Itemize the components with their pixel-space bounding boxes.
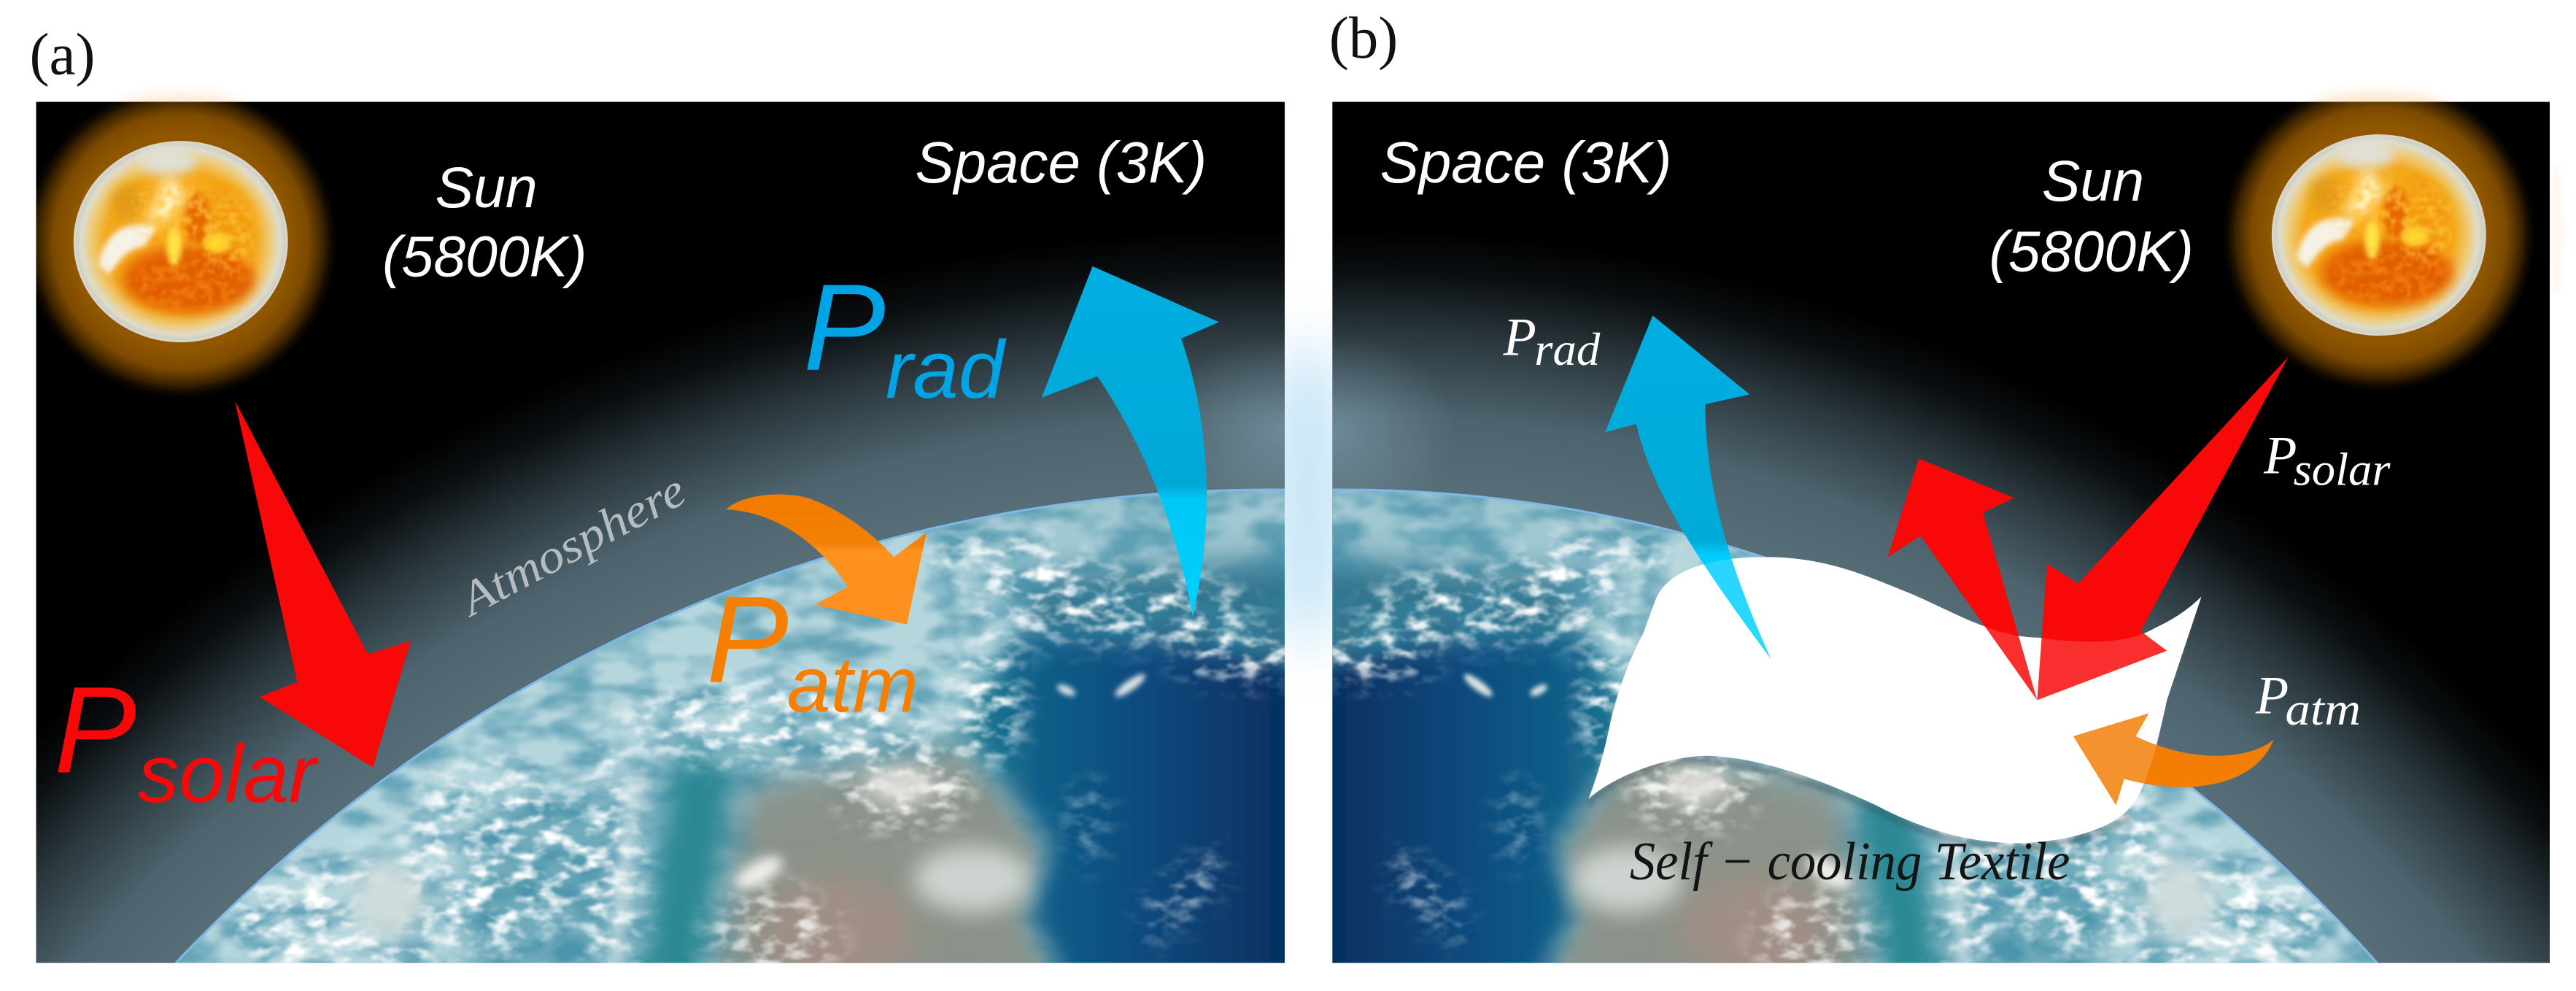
label: P atm: P <box>2255 666 2289 725</box>
label: Atmosphere: Atmosphere <box>449 464 695 628</box>
label: P solar: P <box>54 660 136 798</box>
textile sheet shadow <box>1587 760 2129 848</box>
label: Sun temperature: Sun <box>2042 149 2144 213</box>
label: P rad <box>1503 307 1601 375</box>
label: Sun temperature <box>385 167 584 288</box>
earth limb line <box>176 490 1285 963</box>
panel label (b): (b) <box>1329 5 1398 71</box>
label: Self-cooling Textile: Self − cooling Textile <box>1630 832 2070 892</box>
icon: sun <box>2219 76 2538 395</box>
label: Sun temperature: (5800K) <box>1989 220 2194 284</box>
arrow: radiated power out <box>1605 315 1771 659</box>
label: P rad: P <box>1503 307 1536 367</box>
horizon haze <box>1196 347 1285 489</box>
earth <box>178 490 1285 963</box>
arrow: solar power in <box>235 401 411 768</box>
label: P atm: P <box>706 571 789 709</box>
icon: sun <box>36 102 334 395</box>
label: P rad <box>807 285 1007 398</box>
label: P atm <box>2255 666 2361 735</box>
label: Sun temperature: Sun <box>435 155 538 220</box>
arrow: incoming solar power <box>2037 357 2289 700</box>
arrow: radiated power out <box>1042 266 1219 617</box>
panel label (a): (a) <box>30 21 95 87</box>
horizon haze <box>1209 332 1455 529</box>
panel (b): self-cooling textile energy balance <box>1209 76 2550 990</box>
label: P solar: P <box>2263 426 2297 486</box>
atmosphere glow <box>36 102 1285 963</box>
arrow: atmospheric power in <box>726 495 927 625</box>
arrow: reflected solar power <box>1887 458 2037 700</box>
label: P solar <box>54 660 320 820</box>
label: P atm: atm <box>2285 684 2361 735</box>
label: P rad: P <box>803 258 886 396</box>
label: P atm <box>711 597 915 712</box>
label: P rad: rad <box>1534 324 1601 375</box>
label: Space temperature: Space (3K) <box>1380 130 1671 195</box>
label: P solar <box>2263 426 2391 495</box>
earth limb line <box>1332 490 2378 963</box>
label: P rad: rad <box>886 323 1007 415</box>
textile sheet <box>1589 557 2202 843</box>
label: P atm: atm <box>787 640 918 728</box>
label: P solar: solar <box>2294 444 2391 495</box>
label: Sun temperature <box>1989 149 2194 284</box>
label: Sun temperature: (5800K) <box>382 224 587 288</box>
atmosphere glow <box>1332 102 2550 963</box>
arrow: atmospheric power in <box>2073 713 2274 805</box>
sheet sheen over arrows <box>1589 557 2202 843</box>
earth <box>1304 463 2437 990</box>
label: P solar: solar <box>138 728 320 820</box>
backdrop glows: sun halo bleed and horizon light between the panels <box>115 92 2563 649</box>
panel (a): Earth energy balance <box>36 102 1285 963</box>
label: Space temperature: Space (3K) <box>915 130 1207 195</box>
